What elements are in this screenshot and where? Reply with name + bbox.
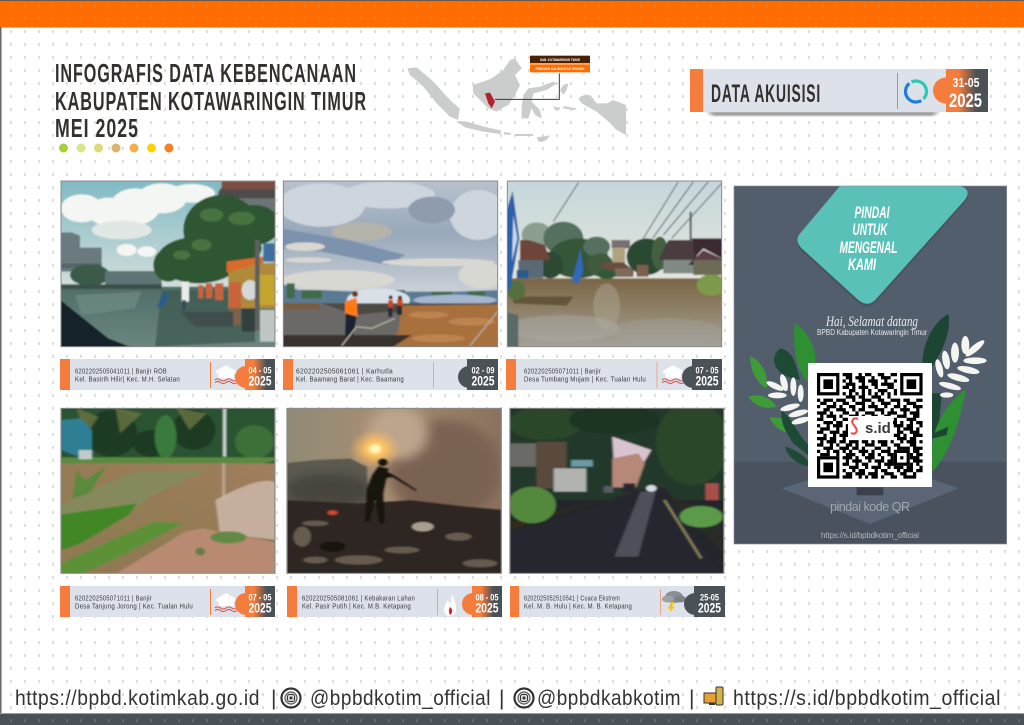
foliage (748, 314, 987, 472)
footer contact strip: | (689, 687, 695, 710)
caption text: Kel. Basirih Hilir| Kec. M.H. Selatan (75, 376, 180, 384)
poster URL: https://s.id/bpbdkotim_official (821, 531, 919, 540)
photo 6: wet road after storm (506, 402, 729, 577)
date badge: 2025 (476, 600, 499, 616)
banner text (840, 204, 898, 274)
caption text: Kel. M. B. Hulu | Kec. M. B. Ketapang (524, 604, 632, 610)
caption text: 6202025052510541 | Cuaca Ekstrem (524, 596, 620, 602)
caption text (75, 368, 180, 384)
caption bar 2 (283, 359, 498, 390)
highlighted regency (485, 93, 495, 108)
footer contact strip: @bpbdkotim_official (310, 687, 491, 710)
caption text (302, 596, 415, 610)
caption text: 6202202505071011 | Banjir (75, 596, 152, 602)
footer contact strip: | (499, 687, 505, 710)
bottom dark band (0, 713, 1024, 725)
caption bar 1 (60, 359, 275, 390)
icon: flood house (215, 594, 237, 612)
icon: instagram (514, 688, 534, 708)
caption text: Kel. Pasir Putih | Kec. M.B. Ketapang (302, 604, 411, 610)
icon: progress ring (902, 77, 930, 106)
date badge: 07 - 05 (696, 366, 719, 376)
footer contact strip: | (271, 687, 277, 710)
photo 4: flooded field (57, 405, 278, 577)
QR code (808, 363, 932, 487)
caption text: 6202202505081061 | Kebakaran Lahan (302, 596, 415, 602)
photo 1: flooded street (58, 178, 280, 350)
date badge: 2025 (472, 372, 495, 388)
greeting: BPBD Kabupaten Kotawaringin Timur (817, 328, 927, 337)
date badge (682, 359, 722, 390)
date badge: 04 - 05 (248, 366, 272, 376)
date badge: 2025 (698, 600, 721, 616)
footer contact strip: @bpbdkabkotim (537, 687, 681, 710)
caption text: Desa Tumbang Mujam | Kec. Tualan Hulu (524, 376, 646, 384)
caption bar 5 (287, 586, 502, 617)
date badge (458, 359, 498, 390)
data akuisisi header bar (690, 69, 988, 116)
date badge (684, 586, 725, 617)
caption text (75, 596, 193, 610)
title: MEI 2025 (55, 113, 139, 143)
caption text: 6202202505061061 | Karhutla (296, 368, 393, 376)
date badge (235, 586, 275, 617)
date badge (462, 586, 502, 617)
banner text: KAMI (848, 256, 876, 274)
date badge: 25-05 (700, 592, 720, 604)
panel: QR scan poster (734, 186, 1007, 544)
banner text: UNTUK (852, 221, 888, 239)
footer contact strip (15, 687, 1001, 710)
map of Indonesia (407, 56, 626, 142)
caption bar 4 (60, 586, 275, 617)
caption text (296, 368, 404, 384)
icon: storm cloud (662, 591, 686, 613)
greeting (817, 314, 927, 337)
caption text: 6202202505071011 | Banjir (524, 368, 601, 376)
date badge (933, 69, 988, 112)
date badge (235, 359, 275, 390)
scan caption: pindai kode QR (830, 500, 910, 514)
date badge: 2025 (248, 372, 272, 388)
top orange band (0, 0, 1024, 28)
province label (530, 64, 590, 72)
caption bar 6 (510, 586, 725, 617)
regency label (530, 56, 590, 63)
date badge: 2025 (696, 372, 719, 388)
footer contact strip: https://s.id/bpbdkotim_official (733, 687, 1001, 710)
icon: flame (444, 594, 456, 616)
teal diamond banner (797, 186, 968, 306)
icon: flood house (215, 366, 237, 384)
heading: data akuisisi: DATA AKUISISI (711, 80, 821, 108)
left edge line (0, 27, 2, 714)
footer contact strip: https://bpbd.kotimkab.go.id (15, 687, 260, 710)
date badge: 2025 (248, 600, 272, 616)
map leader line (495, 73, 559, 99)
scan-stand shadow (857, 487, 883, 495)
caption bar 3 (506, 359, 722, 390)
decorative colour dots (59, 144, 174, 152)
title: INFOGRAFIS DATA KEBENCANAAN (55, 58, 357, 88)
greeting: Hai, Selamat datang (825, 314, 918, 330)
icon: devices (704, 687, 723, 705)
s.id logo: s.id (865, 420, 891, 437)
icon: flood house (662, 366, 684, 384)
caption text: 6202202505041011 | Banjir ROB (75, 368, 167, 376)
date badge: 2025 (949, 91, 982, 112)
title: KABUPATEN KOTAWARINGIN TIMUR (55, 86, 367, 116)
caption text: Desa Tanjung Jorong | Kec. Tualan Hulu (75, 604, 193, 610)
photo 2: peatland fire crew (278, 178, 507, 350)
banner text: MENGENAL (840, 239, 898, 257)
banner text: PINDAI (854, 204, 890, 222)
date badge: 02 - 09 (472, 366, 494, 376)
date badge: 07 - 05 (248, 592, 272, 604)
regency label: KAB. KOTAWARINGIN TIMUR (540, 58, 580, 62)
photo 5: firefighter in smoke (283, 405, 506, 577)
caption text (524, 596, 632, 610)
date badge: 31-05 (952, 75, 980, 90)
province label: PROVINSI KALIMANTAN TENGAH (536, 67, 585, 71)
date badge: 08 - 05 (476, 592, 499, 604)
photo 3: flooded village (504, 178, 727, 350)
title (55, 58, 367, 143)
icon: instagram (282, 688, 300, 708)
caption text (524, 368, 646, 384)
caption text: Kel. Baamang Barat | Kec. Baamang (296, 376, 404, 384)
